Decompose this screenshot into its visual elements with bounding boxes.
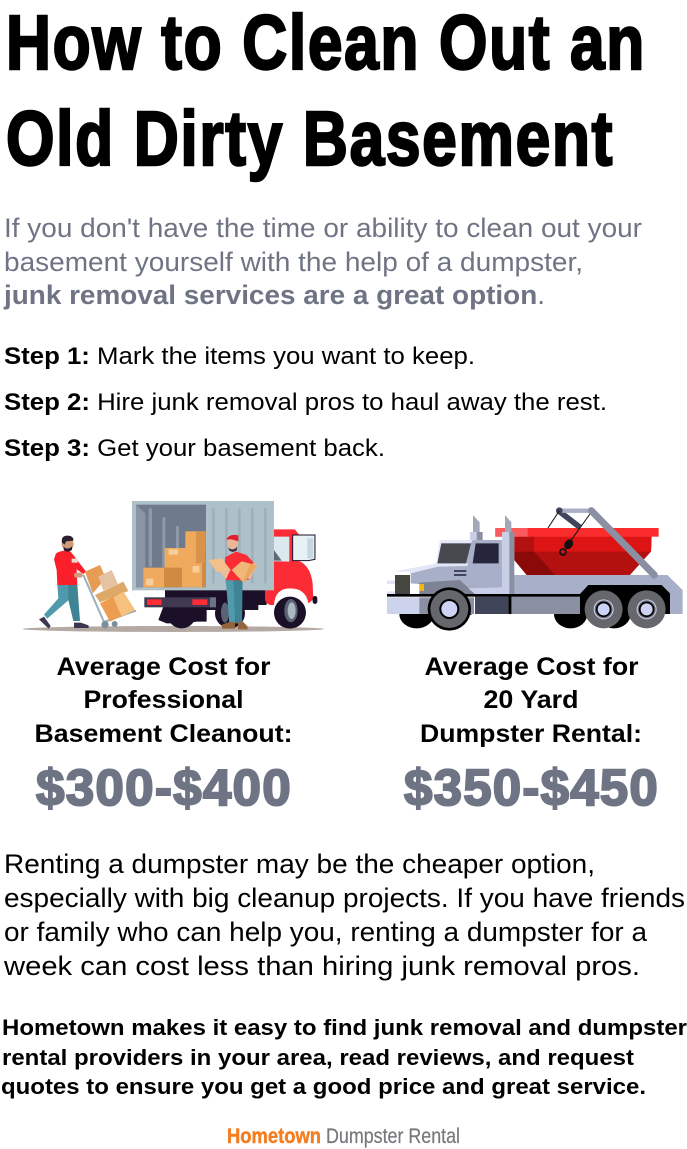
stacked boxes in truck (185, 531, 206, 549)
cost label: dumpster rental (420, 653, 642, 748)
cost label: basement cleanout: Average Cost for (56, 653, 271, 681)
price: dumpster: $350-$450 (404, 759, 659, 816)
steps list: Step 2: Hire junk removal pros to haul away the rest. (4, 389, 607, 416)
steps list (4, 343, 607, 462)
boxes on hand truck (85, 565, 106, 593)
hand truck (83, 575, 136, 622)
logo (227, 1125, 460, 1148)
lift arm and hook (558, 511, 580, 527)
intro text: basement yourself with the help of a dumpster, (4, 247, 583, 277)
closing paragraph: Hometown makes it easy to find junk removal and dumpster (2, 1015, 687, 1040)
cost label: dumpster rental: Dumpster Rental: (420, 720, 642, 748)
title (6, 0, 646, 182)
cost label: dumpster rental: Average Cost for (424, 653, 639, 681)
comparison paragraph: week can cost less than hiring junk removal pros. (3, 951, 640, 981)
intro text: If you don't have the time or ability to clean out your (4, 213, 642, 243)
logo: Hometown (227, 1125, 321, 1148)
comparison paragraph: especially with big cleanup projects. If you have friends (4, 883, 685, 913)
mover with clipboard (208, 535, 257, 629)
closing paragraph (1, 1015, 687, 1099)
comparison paragraph: or family who can help you, renting a dumpster for a (4, 917, 648, 947)
cost label: basement cleanout (34, 653, 292, 748)
cab (387, 515, 580, 628)
cost label: basement cleanout: Professional (84, 686, 244, 714)
cargo box (132, 501, 274, 590)
truck cab (265, 529, 317, 629)
dumpster bin (514, 537, 652, 575)
closing paragraph: rental providers in your area, read reviews, and request (2, 1045, 635, 1070)
comparison paragraph: Renting a dumpster may be the cheaper option, (4, 849, 595, 879)
closing paragraph: quotes to ensure you get a good price and great service. (1, 1074, 646, 1099)
illustration: movers and box truck (23, 501, 324, 632)
logo: Dumpster Rental (326, 1125, 460, 1148)
cost label: dumpster rental: 20 Yard (484, 686, 578, 714)
illustration: dumpster truck (387, 507, 683, 631)
comparison paragraph (3, 849, 685, 981)
steps list: Step 1: Mark the items you want to keep. (4, 343, 475, 370)
price: cleanout: $300-$400 (36, 759, 292, 816)
intro text: junk removal services are a great option . (3, 280, 545, 310)
truck bed (513, 575, 683, 614)
truck chassis (158, 590, 267, 623)
cost label: basement cleanout: Basement Cleanout: (34, 720, 292, 748)
intro text (3, 213, 642, 310)
ground shadow (23, 626, 324, 632)
steps list: Step 3: Get your basement back. (4, 435, 385, 462)
wheels (428, 587, 471, 631)
mover with hand truck (39, 536, 136, 629)
